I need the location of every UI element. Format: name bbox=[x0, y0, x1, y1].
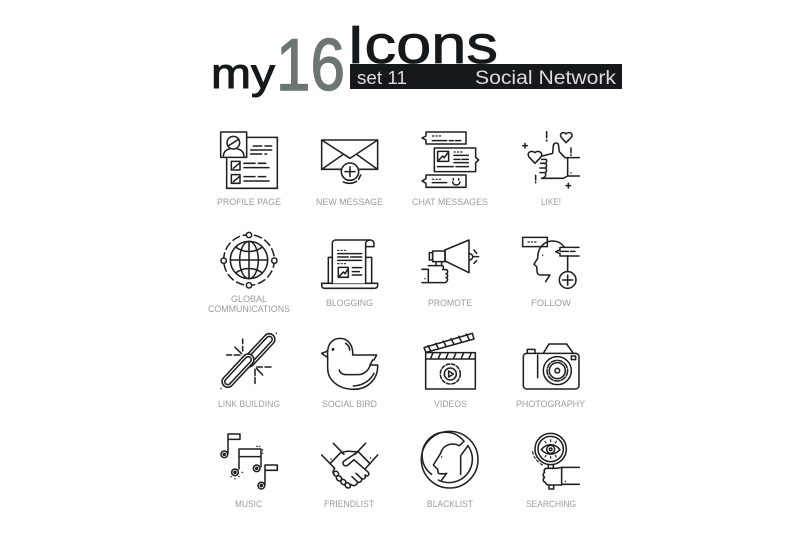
label: new message: NEW MESSAGE bbox=[316, 197, 383, 208]
subtitle: set 11: set 11 bbox=[357, 68, 407, 88]
label: promote: PROMOTE bbox=[428, 298, 472, 309]
title word: Icons: Icons bbox=[347, 15, 498, 75]
icon: searching bbox=[533, 433, 579, 489]
icon: social bird bbox=[322, 338, 378, 389]
icon: videos bbox=[424, 333, 475, 389]
icon: promote bbox=[422, 240, 479, 283]
icon: global communications bbox=[221, 232, 277, 288]
icon: blogging bbox=[322, 240, 378, 288]
label: music: MUSIC bbox=[235, 499, 262, 510]
label: chat messages: CHAT MESSAGES bbox=[412, 197, 488, 208]
subtitle: Social Network: Social Network bbox=[475, 68, 617, 89]
label: blogging: BLOGGING bbox=[326, 298, 373, 309]
label: global communications: GLOBAL bbox=[231, 294, 267, 305]
icon: friendlist bbox=[322, 443, 378, 489]
label: follow: FOLLOW bbox=[531, 298, 571, 309]
label: like: LIKE! bbox=[541, 197, 561, 208]
label: social bird: SOCIAL BIRD bbox=[322, 399, 377, 410]
label: blacklist: BLACKLIST bbox=[427, 499, 473, 510]
title number: 16: 16 bbox=[276, 25, 345, 106]
title word: my: my bbox=[211, 50, 276, 98]
label: global communications bbox=[208, 294, 290, 315]
icon: new message bbox=[322, 140, 378, 183]
label: photography: PHOTOGRAPHY bbox=[516, 399, 586, 410]
label: videos: VIDEOS bbox=[434, 399, 467, 410]
label: link building: LINK BUILDING bbox=[218, 399, 280, 410]
icon: profile page bbox=[221, 132, 277, 188]
icon: like bbox=[523, 132, 579, 188]
label: profile page: PROFILE PAGE bbox=[217, 197, 281, 208]
icon: follow bbox=[523, 237, 579, 288]
icon: blacklist bbox=[421, 431, 478, 488]
label: searching: SEARCHING bbox=[526, 499, 576, 510]
header: my16 Icons title bbox=[211, 15, 622, 106]
label: friendlist: FRIENDLIST bbox=[324, 499, 374, 510]
icon: music bbox=[221, 434, 277, 489]
icon: chat messages bbox=[422, 132, 479, 187]
label: global communications: COMMUNICATIONS bbox=[208, 304, 290, 315]
subtitle bar bbox=[350, 64, 622, 89]
icon: photography bbox=[523, 344, 579, 389]
icon: link building bbox=[220, 331, 277, 390]
